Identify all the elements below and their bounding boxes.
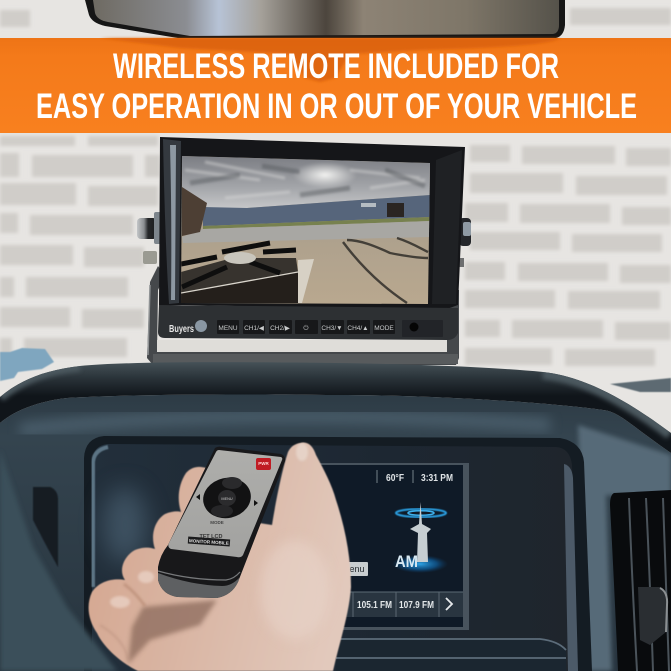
buttons [217, 320, 443, 337]
menu button: Menu [342, 564, 365, 574]
right window ledge [610, 378, 671, 392]
brand logo: Buyers [169, 324, 194, 335]
button labels: CH2/▶ [270, 325, 291, 332]
face highlight band [20, 416, 550, 430]
building [203, 195, 430, 226]
radio presets [340, 592, 463, 617]
remote red power button: PWR [258, 461, 269, 466]
wireless remote [158, 447, 285, 598]
left air vent [33, 487, 58, 567]
AM radio tower icon: AM [395, 553, 418, 571]
pavement cracks [343, 238, 428, 303]
left chrome edge [93, 447, 108, 587]
rear-view mirror [85, 0, 565, 40]
lower trim lines under screen [336, 639, 566, 671]
remote labels: MODE [210, 520, 224, 525]
infotainment bezel [84, 436, 592, 671]
button labels: MODE [374, 325, 394, 332]
lavender side strip [564, 464, 578, 671]
remote labels [188, 520, 230, 546]
menu button [340, 562, 368, 576]
control bar [158, 305, 458, 340]
button labels: MENU [218, 325, 238, 332]
left-side vehicle clip beyond dash [0, 348, 54, 381]
status readouts: 3:31 PM [421, 472, 453, 484]
infotainment screen [318, 463, 469, 630]
button labels: CH3/▼ [321, 325, 343, 332]
button labels: CH1/◀ [244, 325, 265, 332]
palm shadow under remote [128, 600, 217, 664]
status readouts: 60°F [386, 472, 404, 484]
banner headline [36, 47, 637, 126]
button labels: ⏻ [303, 325, 309, 332]
radio presets: 107.9 FM [399, 600, 434, 611]
background: brick wall [0, 0, 671, 400]
right light face [578, 425, 671, 671]
AM radio tower icon [392, 502, 448, 573]
orange banner [0, 38, 671, 133]
radio presets: 105.1 FM [357, 600, 392, 611]
dashboard lower face [0, 394, 671, 671]
camera picture on screen [180, 155, 432, 305]
U bracket [147, 266, 459, 365]
mounting knobs [137, 212, 471, 267]
hand holding remote [89, 443, 351, 671]
sleeve of driver [0, 450, 117, 671]
remote red power button [256, 458, 271, 470]
button labels [218, 325, 394, 332]
monitor [137, 137, 471, 365]
tow plate [182, 187, 207, 236]
remote labels: MONITOR MOBILE [189, 538, 229, 546]
status readouts [386, 472, 453, 484]
brand logo [169, 320, 207, 335]
finger highlights [110, 596, 130, 608]
remote d-pad: MENU [221, 497, 233, 501]
remote labels: TFT LCD [200, 534, 222, 540]
dashboard top rim [0, 362, 671, 453]
right air vent [610, 490, 671, 671]
button labels: CH4/▲ [347, 325, 369, 332]
remote d-pad [196, 473, 258, 523]
sun hood [159, 137, 465, 310]
